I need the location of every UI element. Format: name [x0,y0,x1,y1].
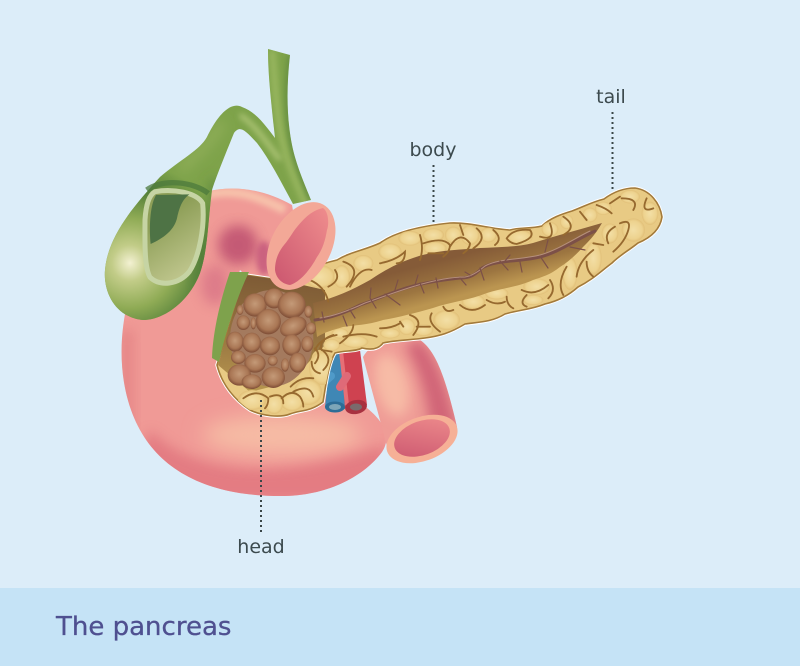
gallbladder section [145,183,208,283]
dotted leader: head [260,400,262,532]
dotted leader: tail [612,112,614,189]
pancreas outline and body [217,188,662,416]
lobule borders: head [243,335,337,408]
duodenum: upper opening [252,190,350,302]
pancreatic duct [315,231,595,326]
artery [340,350,368,416]
dotted leader: body [432,165,434,224]
opening interior [389,412,455,464]
lobule borders: body and tail [310,197,653,363]
tumour nodules [226,288,316,389]
label: tail: tail [596,86,626,108]
cavity [313,223,602,337]
bile duct [212,272,249,362]
vein [320,350,345,412]
label: head: head [237,536,285,558]
title: The pancreas [55,612,231,642]
duodenum: lower tube with opening [363,340,458,464]
opening interior [275,208,328,285]
window [145,191,203,283]
pancreas [217,188,662,416]
dark band [147,183,208,193]
opening rim [380,406,464,472]
gallbladder and bile ducts [104,49,311,320]
blood vessels [320,350,368,416]
duodenum [120,188,386,500]
title band [0,588,800,666]
lobules [305,190,658,367]
head cavity [218,272,325,392]
duodenum: main curve [122,188,386,496]
shaded interior [150,194,189,244]
opening rim [252,190,350,302]
label: body: body [410,139,456,161]
